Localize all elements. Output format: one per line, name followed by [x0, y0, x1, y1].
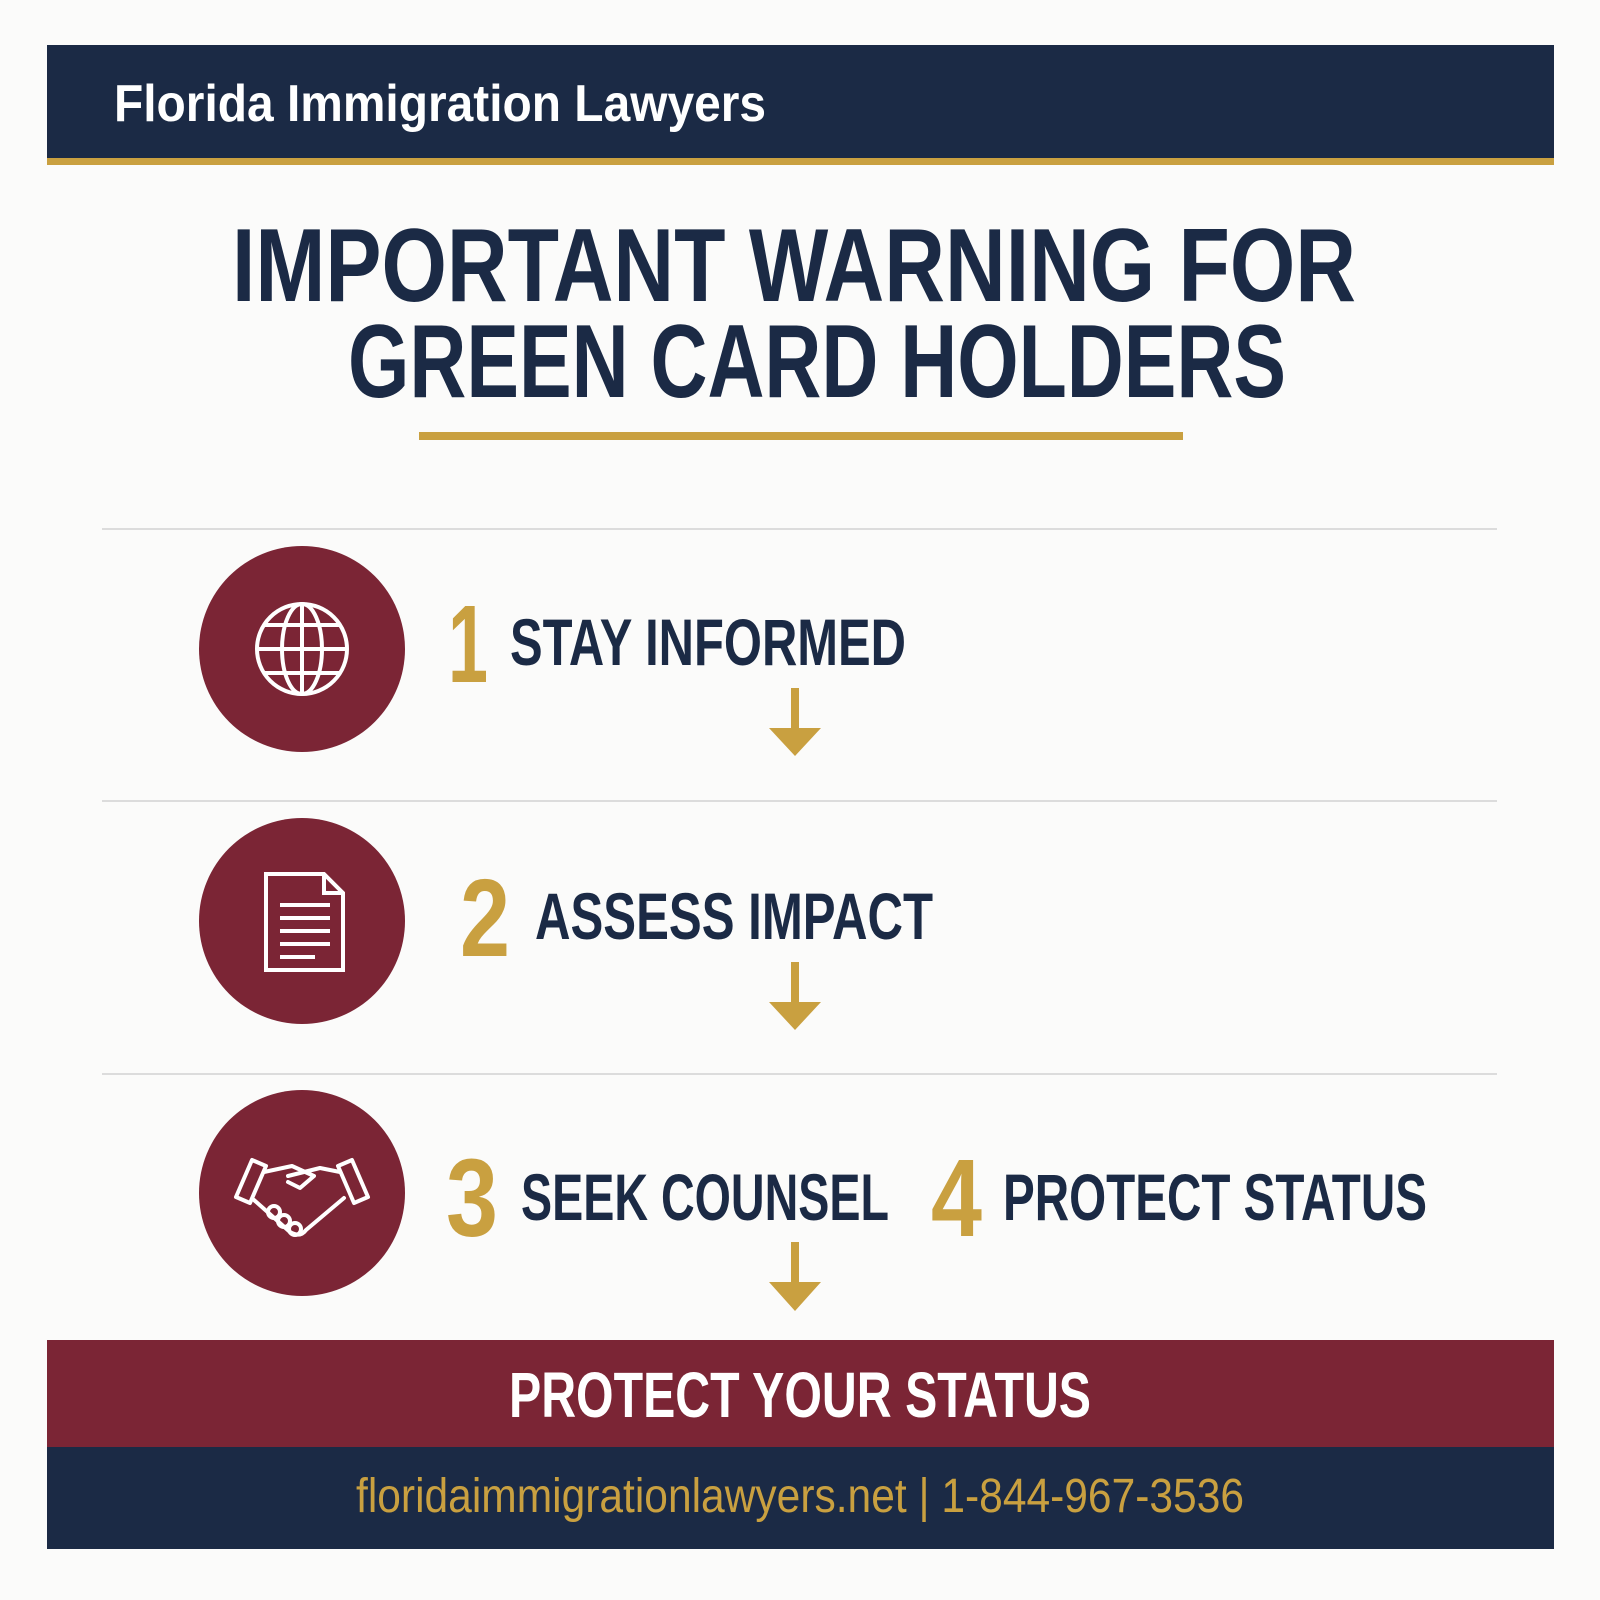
- header text: Florida Immigration Lawyers: [114, 75, 766, 133]
- banner: protect your status: [47, 1340, 1554, 1447]
- title underline: [419, 432, 1183, 440]
- arrow: [769, 962, 821, 1030]
- step 2: assess impact: ASSESS IMPACT: [535, 879, 933, 953]
- step 3 and 4: [199, 1090, 1427, 1311]
- step 1: stay informed: 1: [448, 583, 488, 706]
- arrow: [769, 1242, 821, 1311]
- step 3 and 4: SEEK COUNSEL: [521, 1160, 889, 1234]
- step 1: stay informed: STAY INFORMED: [510, 605, 906, 679]
- step 3 and 4: 4: [931, 1137, 982, 1260]
- step 2: assess impact: 2: [460, 857, 510, 980]
- banner: protect your status: PROTECT YOUR STATUS: [509, 1359, 1091, 1431]
- footer contact bar: [47, 1447, 1554, 1549]
- step 1: stay informed: [199, 546, 906, 756]
- icon: document: [199, 818, 405, 1024]
- icon: handshake: [199, 1090, 405, 1296]
- title: [232, 208, 1356, 420]
- arrow: [769, 688, 821, 756]
- title: IMPORTANT WARNING FOR: [232, 208, 1356, 324]
- header bar: [47, 45, 1554, 165]
- step 2: assess impact: [199, 818, 933, 1030]
- icon: globe: [199, 546, 405, 752]
- footer contact bar: floridaimmigrationlawyers.net | 1-844-967-3536: [356, 1470, 1244, 1523]
- step 3 and 4: PROTECT STATUS: [1003, 1160, 1427, 1234]
- title: GREEN CARD HOLDERS: [348, 304, 1286, 420]
- step 3 and 4: 3: [446, 1137, 498, 1260]
